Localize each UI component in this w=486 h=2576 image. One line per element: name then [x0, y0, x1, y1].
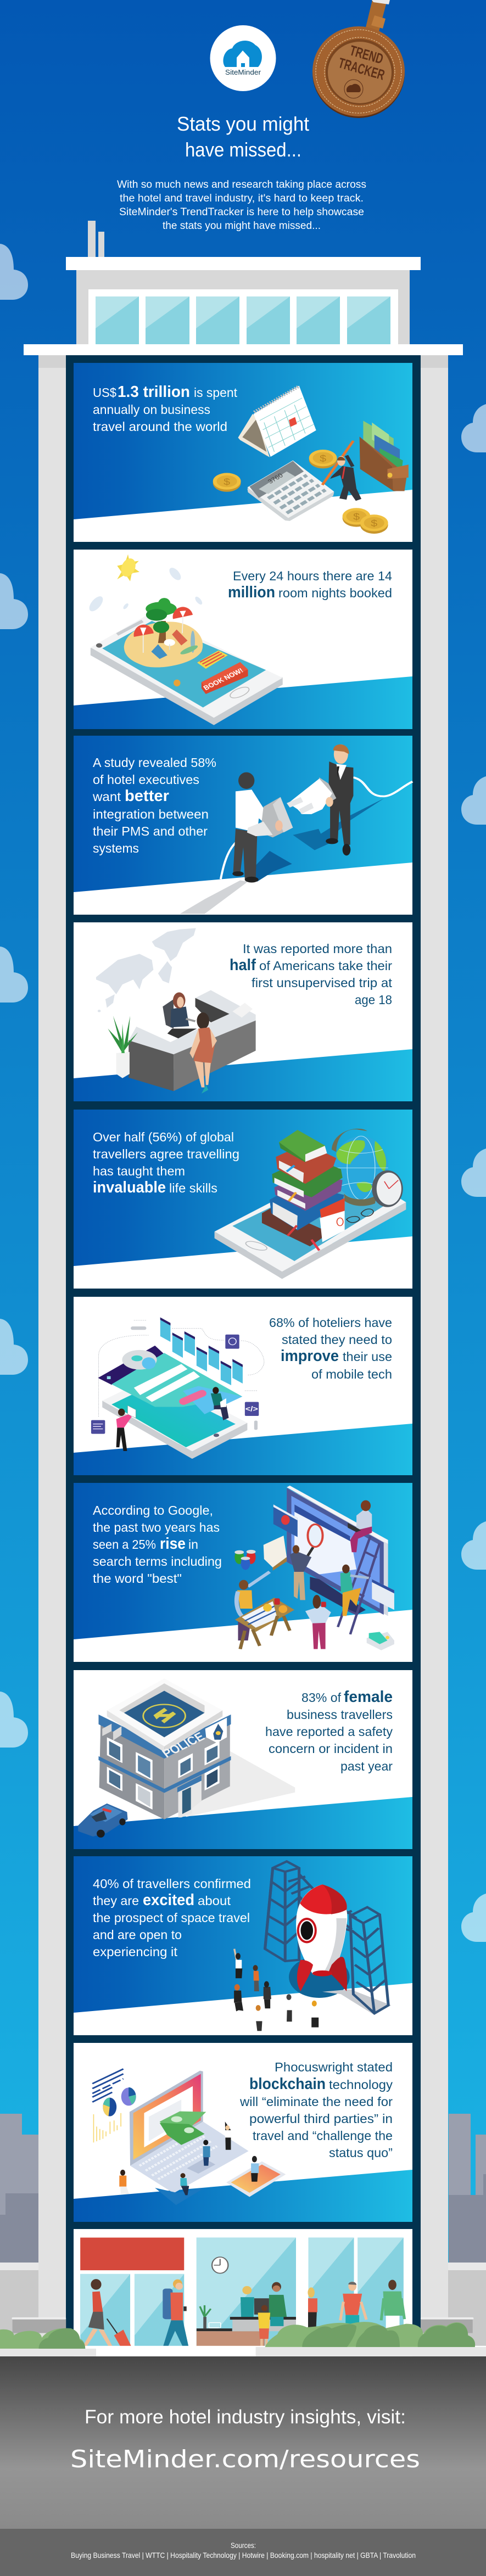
- panel 8: female business traveller safety: [74, 1670, 412, 1849]
- title: Stats you might: [177, 113, 309, 135]
- stat text 8: concern or incident in: [269, 1741, 393, 1756]
- stat text 3: A study revealed 58%: [93, 755, 216, 770]
- stat text 5: Over half (56%) of global: [93, 1130, 234, 1144]
- illustration: calendar, calculator, coins and wallet: $: [353, 512, 360, 522]
- stat text 10: status quo”: [329, 2146, 393, 2160]
- stat text 5: has taught them: [93, 1164, 185, 1178]
- illustration: website building team around giant monitor: [234, 1486, 394, 1650]
- panel 4: first unsupervised trip: [74, 922, 412, 1101]
- illustration: two businessmen connecting a plug: [180, 744, 412, 914]
- stat text 9: the prospect of space travel: [93, 1911, 250, 1925]
- stat text 6: of mobile tech: [311, 1367, 392, 1381]
- illustration: calendar, calculator, coins and wallet: 3760: [266, 472, 284, 485]
- stat text 9: 40% of travellers confirmed: [93, 1877, 251, 1891]
- icon: leather Trend Tracker luggage tag: TREND: [348, 42, 385, 67]
- sign: red panel above doors: [80, 2238, 184, 2270]
- person: guest in green jacket: [269, 2282, 287, 2326]
- stat text 10: Phocuswright stated: [275, 2060, 393, 2074]
- stat text 3: want: [92, 789, 121, 804]
- stat text 8: past year: [340, 1759, 393, 1773]
- illustration: calendar, calculator, coins and wallet: [213, 385, 409, 534]
- intro text: With so much news and research taking place across: [117, 179, 366, 191]
- illustration: mobile app interface with people: </>: [245, 1405, 258, 1413]
- intro text: the stats you might have missed...: [163, 220, 321, 232]
- person: child: [258, 2305, 270, 2347]
- illustration: phone with tropical island: [87, 555, 283, 725]
- illustration: mobile app interface with people: [91, 1318, 264, 1459]
- call to action text: For more hotel industry insights, visit:: [85, 2406, 406, 2428]
- stat text 3: better: [125, 787, 169, 805]
- illustration: phone with tropical island: BOOK NOW!: [202, 667, 245, 692]
- icon: leather Trend Tracker luggage tag: TRACKER: [337, 54, 387, 83]
- stat text 7: search terms including: [93, 1554, 222, 1569]
- illustration: calendar, calculator, coins and wallet: $: [371, 519, 377, 529]
- stat text 4: of Americans take their: [259, 959, 392, 973]
- stat text 4: half: [230, 956, 256, 974]
- person: woman in red: [308, 2287, 317, 2327]
- stat text 10: [239, 2060, 393, 2160]
- sources strip: Buying Business Travel | WTTC | Hospitality Technology | Hotwire | Booking.com | hospitality net | GBTA | Travolution: [71, 2551, 416, 2560]
- stat text 9: and are open to: [93, 1928, 182, 1942]
- stat text 7: rise: [160, 1535, 186, 1553]
- stat text 6: improve: [281, 1347, 339, 1365]
- illustration: laptop with money and small people: [92, 2069, 286, 2205]
- stat text 4: It was reported more than: [243, 942, 392, 956]
- doors and windows: [80, 2238, 404, 2353]
- panel 6: mobile tech: [74, 1297, 412, 1475]
- stat text 4: first unsupervised trip at: [252, 976, 393, 990]
- stat text 10: will “eliminate the need for: [239, 2095, 393, 2109]
- stat text 6: 68% of hoteliers have: [269, 1315, 392, 1330]
- panel 2: room nights booked: [74, 550, 412, 729]
- person: man in red shirt: [340, 2282, 366, 2325]
- illustration: police station and police car: [78, 1678, 295, 1838]
- stat text 10: powerful third parties” in: [249, 2112, 393, 2126]
- stat text 6: their use: [343, 1349, 392, 1364]
- stat text 5: life skills: [169, 1181, 217, 1195]
- stat text 9: they are: [93, 1894, 139, 1908]
- intro text: the hotel and travel industry, it's hard to keep track.: [120, 193, 364, 204]
- person: backpacker: [160, 2280, 196, 2354]
- illustration: rocket, launch towers and onlookers: [234, 1861, 391, 2031]
- person: woman with suitcase: [79, 2279, 133, 2355]
- panel 3: PMS integration: [74, 736, 412, 915]
- sources strip: [0, 2529, 486, 2576]
- reception desk: [197, 2298, 296, 2353]
- stat text 6: stated they need to: [282, 1332, 392, 1347]
- stat text 10: technology: [329, 2077, 393, 2092]
- panel 7: search terms best: [74, 1483, 412, 1662]
- stat text 8: female: [344, 1688, 393, 1706]
- stat text 1: [93, 383, 238, 434]
- stat text 2: [228, 569, 392, 601]
- illustration: world map and hotel reception desk: [96, 928, 256, 1094]
- illustration: calendar, calculator, coins and wallet: $: [224, 477, 230, 487]
- icon: leather Trend Tracker luggage tag: [312, 0, 405, 118]
- hotel walls and dark frame: [24, 344, 463, 2356]
- panel 5: invaluable life skills: [74, 1110, 412, 1289]
- stat text 6: [269, 1315, 392, 1381]
- panel 10: blockchain: [74, 2043, 412, 2222]
- panel 9: space travel: [74, 1856, 412, 2035]
- stat text 1: US$: [93, 385, 116, 400]
- stat text 3: of hotel executives: [93, 772, 199, 787]
- stat text 9: about: [198, 1894, 231, 1908]
- stat text 1: annually on business: [93, 402, 210, 417]
- stat text 1: travel around the world: [93, 419, 227, 434]
- stat text 8: have reported a safety: [265, 1724, 393, 1739]
- logo: SiteMinder badge: [210, 25, 276, 91]
- sources strip: Sources:: [231, 2541, 256, 2550]
- stat text 1: 1.3 trillion: [118, 383, 190, 401]
- planters and walkway: [0, 2317, 486, 2356]
- stat text 7: the word "best": [93, 1571, 182, 1586]
- stat text 9: excited: [143, 1891, 194, 1909]
- stat text 5: invaluable: [93, 1179, 166, 1196]
- stat text 7: the past two years has: [93, 1520, 220, 1535]
- hotel roof and top floor: [66, 221, 421, 345]
- stat text 2: room nights booked: [278, 586, 392, 600]
- title: [177, 113, 309, 161]
- intro text: SiteMinder's TrendTracker is here to help showcase: [119, 206, 364, 218]
- stat text 8: business travellers: [287, 1707, 393, 1722]
- person: man in green shirt: [381, 2280, 405, 2328]
- stat text 7: According to Google,: [93, 1503, 213, 1517]
- logo: SiteMinder badge: SiteMinder: [225, 68, 261, 76]
- bushes: [0, 2322, 475, 2349]
- stat text 10: travel and “challenge the: [253, 2129, 393, 2143]
- illustration: calendar, calculator, coins and wallet: $: [320, 453, 326, 464]
- stat text 8: 83% of: [301, 1690, 342, 1705]
- stat text 2: Every 24 hours there are 14: [233, 569, 392, 583]
- person: receptionist: [241, 2286, 254, 2317]
- city skyline: [0, 2114, 486, 2358]
- intro text: [117, 179, 366, 232]
- call to action footer: [0, 2356, 486, 2529]
- hotel lobby entrance: [74, 2229, 412, 2356]
- stat text 10: blockchain: [249, 2075, 326, 2093]
- clouds: [0, 244, 486, 1942]
- title: have missed...: [185, 138, 301, 161]
- stat text 7: in: [188, 1537, 198, 1552]
- stat text 3: integration between: [93, 807, 209, 821]
- panel 1: business travel spend: [74, 363, 412, 542]
- stat text 3: [92, 755, 216, 855]
- stat text 7: seen a 25%: [93, 1537, 156, 1552]
- icon: wall clock: [212, 2257, 228, 2273]
- stat text 3: systems: [93, 841, 139, 855]
- stat text 9: [93, 1877, 251, 1959]
- stat text 4: age 18: [355, 993, 392, 1007]
- illustration: police station and police car: POLICE: [159, 1730, 207, 1760]
- stat text 4: [230, 942, 393, 1007]
- stat text 9: experiencing it: [93, 1945, 178, 1959]
- stat text 3: their PMS and other: [93, 824, 208, 838]
- stat text 1: is spent: [194, 385, 238, 400]
- illustration: phone with books, globe and clock: [215, 1129, 406, 1279]
- stat text 8: [265, 1688, 393, 1773]
- stat text 5: travellers agree travelling: [93, 1147, 239, 1161]
- stat text 5: [93, 1130, 239, 1196]
- stat text 7: [93, 1503, 222, 1586]
- website address: SiteMinder.com/resources: [70, 2445, 420, 2473]
- stat text 2: million: [228, 584, 275, 601]
